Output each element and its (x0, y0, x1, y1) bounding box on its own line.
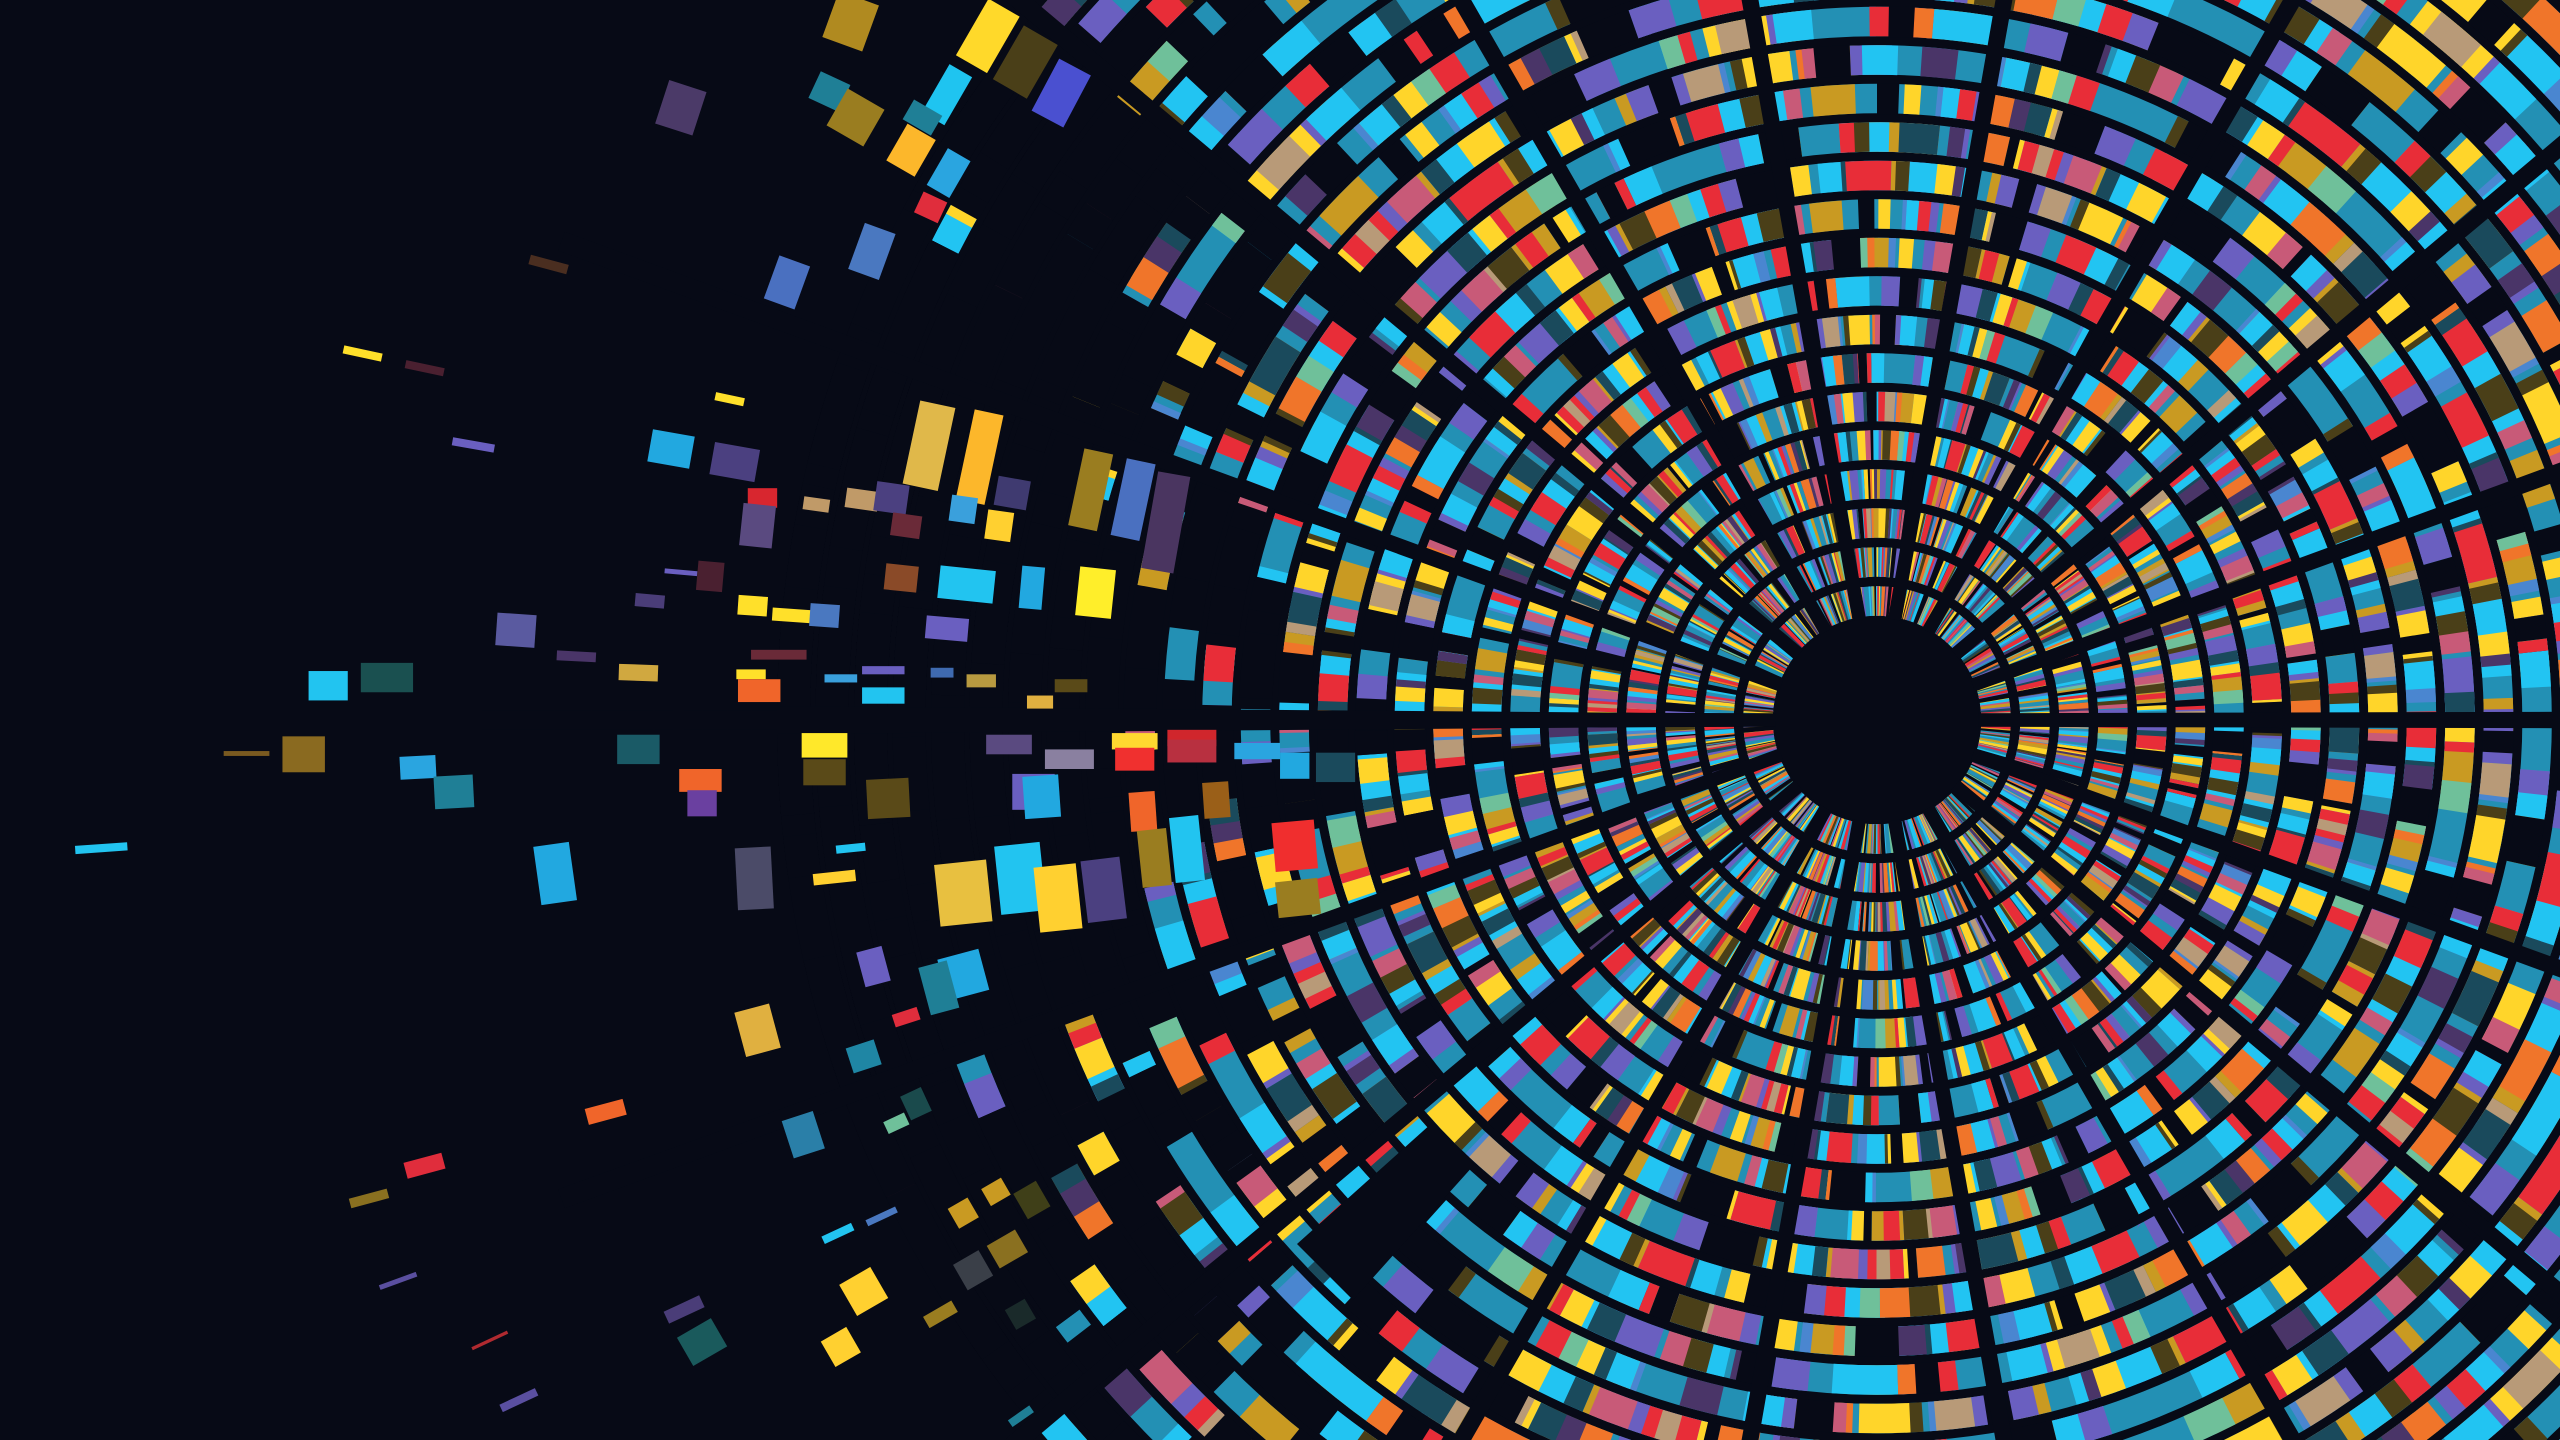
central hole (1775, 618, 1979, 822)
dark wedge along left horizontal axis (777, 706, 1787, 734)
fragmentation: upper and lower sectors (888, 0, 1449, 1440)
fragmentation: left-axis sector (869, 442, 1486, 1048)
dark gap in lower-left rings (1297, 1123, 1474, 1300)
scattered fragments on left (75, 0, 1355, 1427)
chart: concentric data rings (780, 0, 2560, 1440)
fragmentation: mid-left sectors (852, 21, 1378, 1419)
